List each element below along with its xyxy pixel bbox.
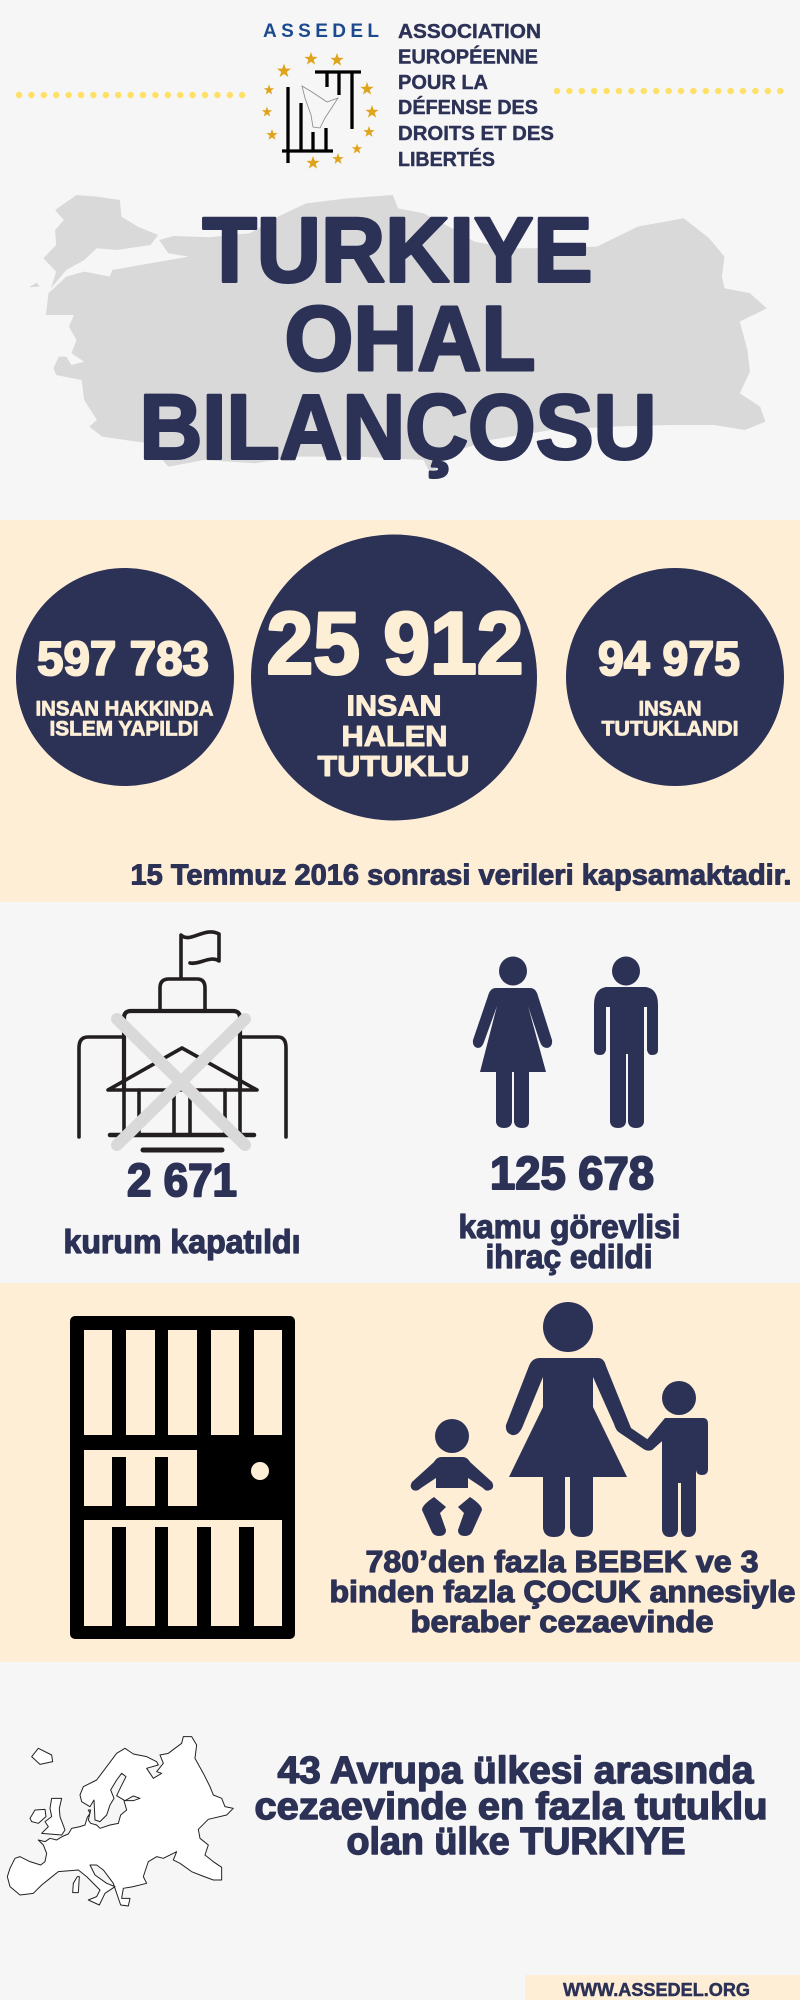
statement: Turkey has most prisoners: 43 Avrupa ülkesi arasında xyxy=(278,1750,754,1792)
footer website tag: WWW.ASSEDEL.ORG xyxy=(563,1980,750,2000)
association name text xyxy=(398,21,554,171)
icon: woman and man xyxy=(473,956,658,1128)
dotted line left xyxy=(19,92,243,98)
icon: prison door xyxy=(70,1316,295,1639)
statement: Turkey has most prisoners: olan ülke TURKIYE xyxy=(346,1821,686,1863)
stat: 2 671 kurum kapatıldı xyxy=(64,1154,300,1260)
association name text: DROITS ET DES xyxy=(398,123,554,145)
stat: 2 671 kurum kapatıldı: 2 671 xyxy=(127,1154,237,1206)
caption: babies and children with mothers: beraber cezaevinde xyxy=(410,1604,714,1639)
stat circle: 94 975: TUTUKLANDI xyxy=(602,718,738,740)
stat circle: 94 975: 94 975 xyxy=(598,633,740,686)
caption: babies and children with mothers xyxy=(330,1544,796,1639)
association name text: LIBERTÉS xyxy=(398,148,495,171)
stat circle: 25 912: HALEN xyxy=(342,721,448,753)
header logo block xyxy=(262,21,554,171)
title: TURKIYE xyxy=(202,200,592,302)
stat circle: 94 975 xyxy=(566,568,784,786)
baby xyxy=(411,1419,493,1536)
panel: detention statistics xyxy=(0,520,800,902)
stat circle: 25 912: INSAN xyxy=(346,690,442,722)
logo icon: prison bars with dove and stars xyxy=(262,52,379,169)
stat: 125 678 kamu görevlisi ihraç edildi: ihraç edildi xyxy=(486,1238,652,1275)
association name text: DÉFENSE DES xyxy=(398,96,538,119)
title: BILANÇOSU xyxy=(140,376,656,478)
statement: Turkey has most prisoners: cezaevinde en fazla tutuklu xyxy=(254,1786,768,1828)
woman xyxy=(473,956,552,1128)
icon: mother with baby and child xyxy=(411,1302,708,1537)
title: OHAL xyxy=(284,288,536,390)
man xyxy=(594,956,658,1128)
title xyxy=(140,200,656,478)
stat circle: 25 912 xyxy=(251,534,537,820)
stat circle: 25 912: 25 912 xyxy=(266,594,524,692)
caption: babies and children with mothers: 780’den fazla BEBEK ve 3 xyxy=(366,1544,758,1579)
panel: mothers and children in prison xyxy=(0,1283,800,1662)
statement: Turkey has most prisoners xyxy=(254,1750,768,1863)
stat circle: 25 912: TUTUKLU xyxy=(318,751,470,783)
stat circle: 597 783: INSAN HAKKINDA xyxy=(36,698,214,720)
stat circle: 94 975: INSAN xyxy=(638,698,702,720)
stat circle: 597 783 xyxy=(16,568,234,786)
stat: 125 678 kamu görevlisi ihraç edildi: 125 678 xyxy=(490,1147,654,1199)
association name text: ASSOCIATION xyxy=(398,21,541,43)
footer website tag xyxy=(525,1975,800,2000)
stat: 125 678 kamu görevlisi ihraç edildi xyxy=(458,1147,680,1275)
association name text: POUR LA xyxy=(398,72,488,94)
stat: 125 678 kamu görevlisi ihraç edildi: kamu görevlisi xyxy=(458,1208,680,1245)
stat circle: 597 783: 597 783 xyxy=(37,633,209,686)
dotted line right xyxy=(557,88,781,94)
date note: 15 Temmuz 2016 sonrasi verileri kapsamaktadir. xyxy=(130,860,792,892)
mother xyxy=(506,1302,678,1537)
map of Europe xyxy=(7,1737,233,1906)
association name text: EUROPÉENNE xyxy=(398,46,538,68)
logo wordmark: ASSEDEL: ASSEDEL xyxy=(263,21,379,42)
caption: babies and children with mothers: binden fazla ÇOCUK annesiyle xyxy=(330,1574,796,1609)
child xyxy=(645,1381,708,1537)
map of Turkey background xyxy=(30,195,767,480)
stat circle: 597 783: ISLEM YAPILDI xyxy=(50,718,198,740)
stat: 2 671 kurum kapatıldı: kurum kapatıldı xyxy=(64,1223,300,1260)
icon: closed institution building xyxy=(79,932,286,1150)
